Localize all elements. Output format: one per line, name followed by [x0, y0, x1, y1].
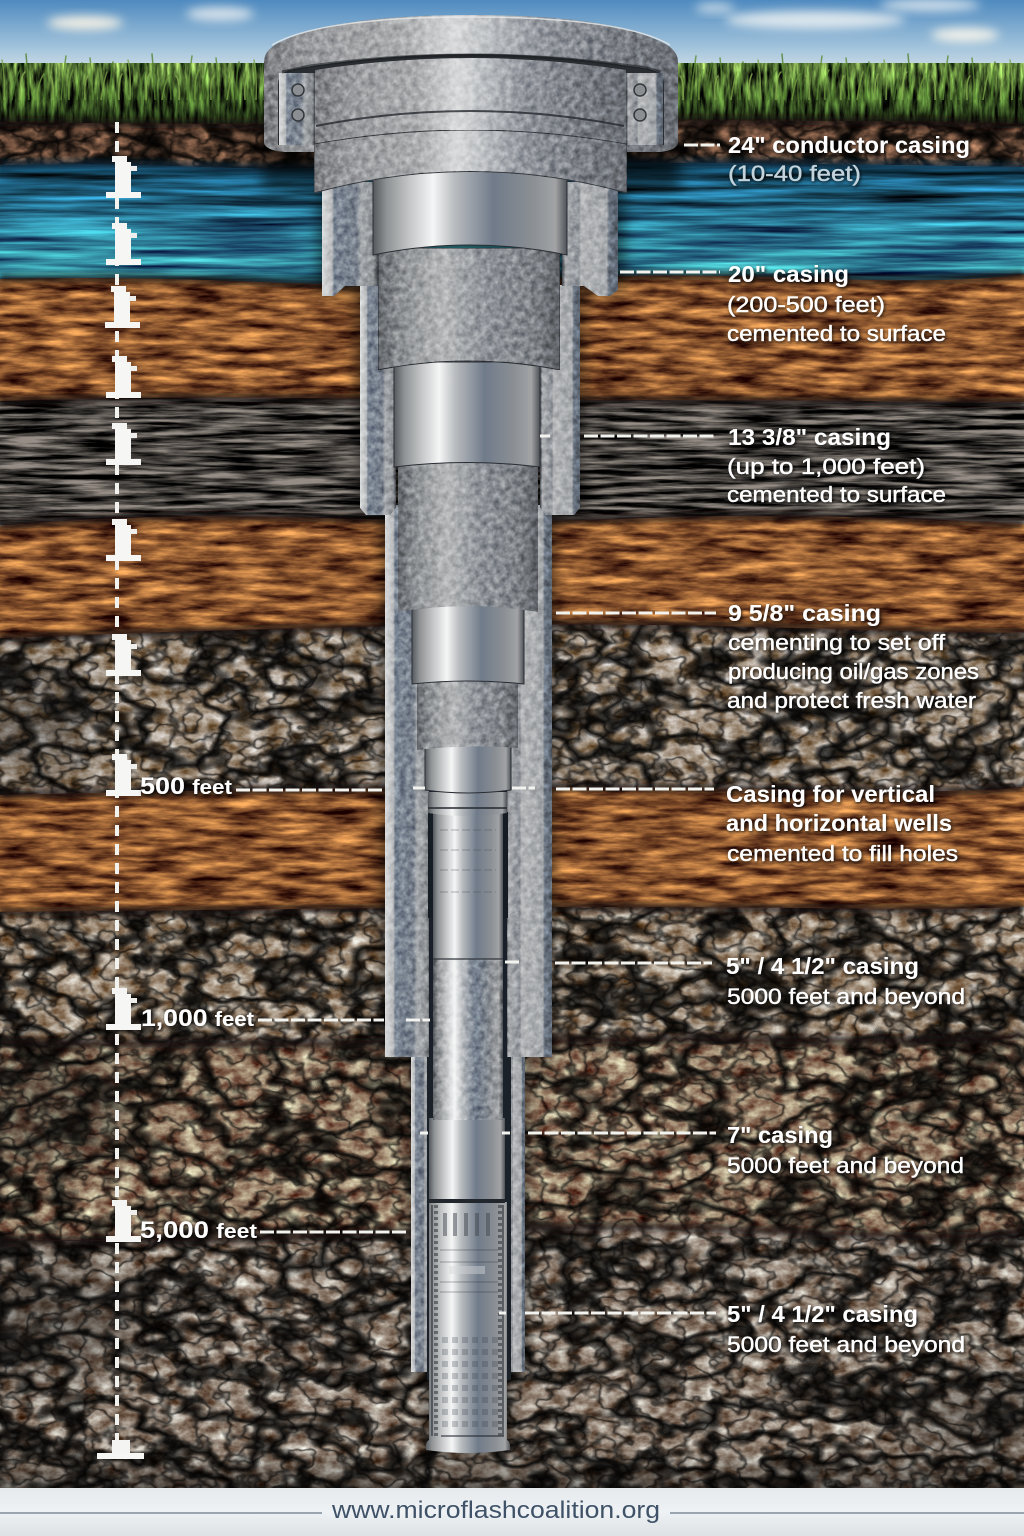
- label: 20 inch casing: (200-500 feet): [727, 292, 885, 317]
- lower sleeve: [411, 1050, 525, 1380]
- label: 7 inch casing: 5000 feet and beyond: [727, 1153, 964, 1178]
- etched upper pipe: [428, 812, 508, 918]
- flange top highlight: [272, 17, 670, 45]
- label: 13 3/8 inch casing: 13 3/8" casing: [728, 424, 891, 450]
- label: 5,000 feet: 5,000 feet: [140, 1217, 257, 1244]
- label: vertical and horizontal wells casing: Casing for vertical: [726, 781, 935, 807]
- label: 7 inch casing: [727, 1122, 964, 1178]
- label: 9 5/8 inch casing: 9 5/8" casing: [728, 600, 881, 626]
- bottom perforated tool: [426, 1202, 510, 1453]
- dark seams between layers: [0, 120, 1024, 1241]
- shiny section: [394, 362, 540, 467]
- 9 5/8 inch outer sleeve: [385, 505, 552, 1057]
- label: lower 5 inch / 4 1/2 inch casing: 5000 feet and beyond: [727, 1332, 965, 1357]
- label: 5 inch / 4 1/2 inch casing: [726, 953, 965, 1009]
- cracked brown rock layer 3: [0, 1034, 1024, 1240]
- label: 20 inch casing: 20" casing: [728, 261, 849, 287]
- label: 1,000 feet: 1,000 feet: [141, 1005, 254, 1032]
- casing labels: [726, 132, 979, 1357]
- label: 20 inch casing: cemented to surface: [727, 321, 946, 346]
- label: vertical and horizontal wells casing: and horizontal wells: [726, 810, 952, 836]
- shiny 5 1/2 inch section: [425, 745, 511, 793]
- label: 5 inch / 4 1/2 inch casing: 5" / 4 1/2" casing: [726, 953, 919, 979]
- depth markers: [97, 156, 144, 1459]
- label: 5 inch / 4 1/2 inch casing: 5000 feet and beyond: [727, 984, 965, 1009]
- lower ring: [314, 130, 627, 193]
- dark line under flange band: [282, 55, 660, 72]
- label: 9 5/8 inch casing: cementing to set off: [728, 630, 946, 655]
- label: 24 inch conductor casing: [728, 132, 970, 186]
- outer flange silhouette: [264, 15, 678, 152]
- website address: www.microflashcoalition.org: [331, 1497, 660, 1524]
- label: 9 5/8 inch casing: producing oil/gas zones: [728, 659, 979, 684]
- topsoil layer: [0, 120, 1024, 175]
- label: 24 inch conductor casing: (10-40 feet): [728, 161, 861, 186]
- body groove line: [316, 111, 624, 126]
- conductor casing cap: [264, 15, 678, 193]
- soft shading patches on the rock: [0, 670, 1024, 1460]
- brown sediment layer 3: [0, 786, 1024, 920]
- cracked rock layer 4: [0, 1226, 1024, 1490]
- footer bar: [0, 1488, 1024, 1536]
- flange recess: [278, 54, 664, 145]
- rough section: [398, 460, 538, 612]
- label: 9 5/8 inch casing: and protect fresh water: [727, 688, 976, 713]
- cracked rock layer 1: [0, 624, 1024, 800]
- sky with clouds: [0, 0, 1024, 80]
- coupling rings: [428, 792, 507, 816]
- well casing assembly: [262, 15, 680, 1455]
- label: 13 3/8 inch casing: cemented to surface: [727, 482, 946, 507]
- label: vertical and horizontal wells casing: [726, 781, 958, 866]
- label: lower 5 inch / 4 1/2 inch casing: [727, 1301, 965, 1357]
- water aquifer layer: [0, 162, 1024, 285]
- brown sediment layer 2: [0, 516, 1024, 645]
- left bracket: [279, 73, 315, 145]
- cracked rock layer 2: [0, 906, 1024, 1050]
- label: 24 inch conductor casing: 24" conductor casing: [728, 132, 970, 158]
- label: 500 feet: 500 feet: [140, 773, 232, 800]
- body: [315, 58, 626, 144]
- label: vertical and horizontal wells casing: cemented to fill holes: [727, 841, 958, 866]
- label: 13 3/8 inch casing: [727, 424, 946, 507]
- depth scale on the left: [97, 122, 257, 1459]
- shiny top section: [373, 170, 567, 255]
- shiny section: [412, 605, 524, 684]
- rough section: [417, 680, 518, 750]
- dashed vertical scale line: [115, 122, 119, 1452]
- grass band: [0, 50, 1024, 124]
- label: 7 inch casing: 7" casing: [727, 1122, 833, 1148]
- pipe collar: [433, 917, 503, 959]
- label: 20 inch casing: [727, 261, 946, 346]
- 13 3/8 inch outer sleeve: [360, 285, 580, 515]
- label: 13 3/8 inch casing: (up to 1,000 feet): [727, 454, 925, 479]
- label: lower 5 inch / 4 1/2 inch casing: 5" / 4 1/2" casing: [727, 1301, 918, 1327]
- label: 9 5/8 inch casing: [727, 600, 979, 713]
- 7 inch pipe section: [429, 1118, 505, 1203]
- leader lines: [236, 145, 720, 1313]
- dark shale layer 1: [0, 397, 1024, 530]
- 5 inch pipe with etched surface: [433, 958, 503, 1120]
- brown sediment layer 1: [0, 274, 1024, 410]
- casing shadow on the rock: [262, 140, 680, 1455]
- 20 inch casing sleeve: [322, 182, 618, 296]
- rough section: [378, 248, 560, 370]
- right bracket: [626, 73, 663, 145]
